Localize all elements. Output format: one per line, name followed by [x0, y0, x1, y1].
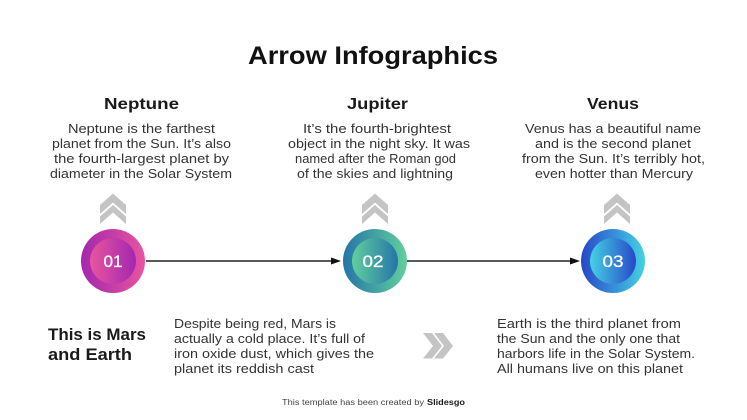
text block: Earth description: the Sun and the only one that: [497, 331, 680, 346]
text block: Neptune description: planet from the Sun. It’s also: [52, 136, 231, 151]
text block: Venus description: [522, 121, 705, 181]
icon: up chevrons 1: [100, 194, 126, 224]
text block: Earth description: harbors life in the Solar System.: [497, 346, 695, 361]
text block: Jupiter description: named after the Roman god: [295, 151, 456, 166]
text block: Jupiter description: object in the night sky. It was: [288, 136, 471, 151]
text block: Neptune description: diameter in the Solar System: [50, 166, 232, 181]
panel: Neptune: [50, 96, 232, 181]
heading: This is Mars and Earth: and Earth: [48, 345, 132, 364]
text block: Neptune description: the fourth-largest planet by: [54, 151, 230, 166]
node: 01: 01: [104, 252, 122, 271]
title: Arrow Infographics: [248, 42, 498, 70]
panel: Venus: [522, 96, 705, 181]
icon: up chevrons 2: [362, 194, 388, 224]
text block: Earth description: [497, 316, 695, 376]
text block: Mars description: [174, 316, 374, 376]
footer credit: This template has been created by: [282, 398, 424, 407]
icon: right chevrons: [423, 333, 453, 358]
text block: Venus description: Venus has a beautiful name: [525, 121, 701, 136]
text block: Mars description: Despite being red, Mars is: [174, 316, 337, 331]
icon: up chevrons 3: [604, 194, 630, 224]
node: 02: [343, 229, 407, 293]
heading: Jupiter: Jupiter: [347, 96, 408, 113]
heading: Venus: Venus: [587, 96, 639, 113]
text block: Jupiter description: of the skies and lightning: [297, 166, 453, 181]
text block: Jupiter description: [288, 121, 471, 181]
panel: Jupiter: [288, 96, 471, 181]
text block: Earth description: All humans live on this planet: [497, 361, 683, 376]
text block: Jupiter description: It’s the fourth-brightest: [303, 121, 451, 136]
text block: Mars description: actually a cold place. It’s full of: [174, 331, 365, 346]
node: 01: [81, 229, 145, 293]
arrow: 02 to 03: [407, 258, 580, 264]
text block: Earth description: Earth is the third planet from: [497, 316, 681, 331]
text block: Venus description: and is the second planet: [535, 136, 691, 151]
footer credit: Slidesgo: [427, 398, 465, 407]
text block: Neptune description: Neptune is the farthest: [68, 121, 215, 136]
node: 03: [581, 229, 645, 293]
heading: Neptune: Neptune: [104, 96, 179, 113]
text block: Venus description: even hotter than Mercury: [535, 166, 694, 181]
text block: Mars description: iron oxide dust, which gives the: [174, 346, 374, 361]
heading: This is Mars and Earth: [48, 325, 146, 364]
footer credit: [282, 398, 465, 407]
text block: Venus description: from the Sun. It’s terribly hot,: [522, 151, 705, 166]
arrow: 01 to 02: [146, 258, 341, 264]
node: 02: 02: [362, 252, 384, 271]
node: 03: 03: [602, 252, 624, 271]
heading: This is Mars and Earth: This is Mars: [48, 325, 146, 344]
text block: Mars description: planet its reddish cast: [174, 361, 314, 376]
text block: Neptune description: [50, 121, 232, 181]
